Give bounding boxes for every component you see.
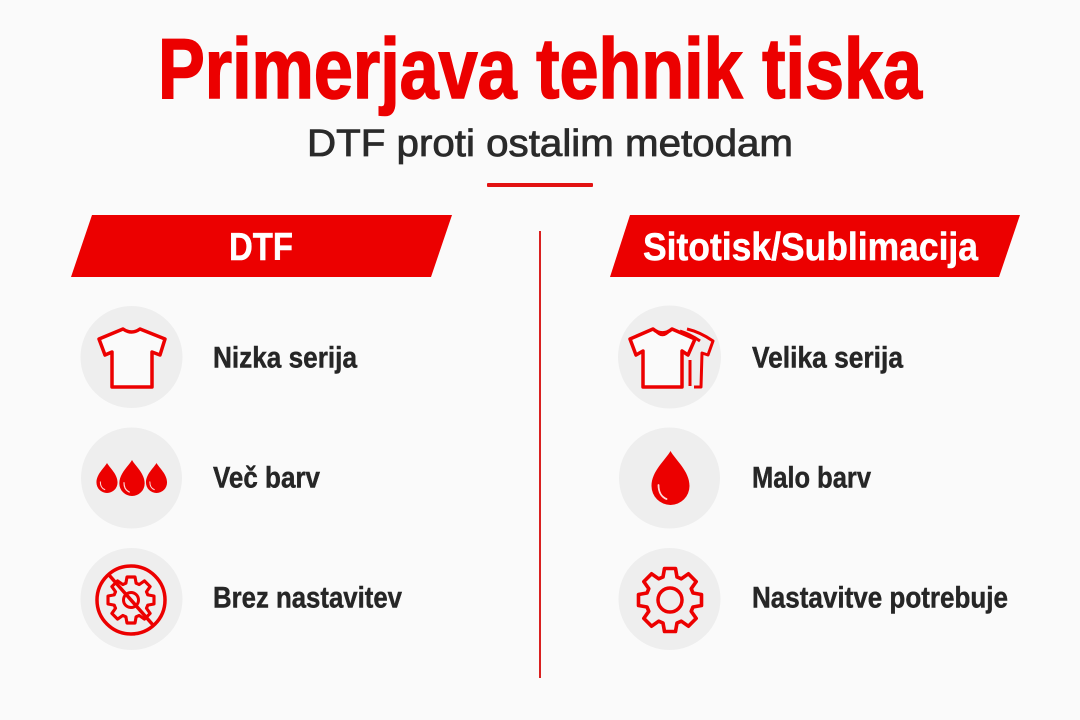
row: Malo barv bbox=[619, 428, 871, 528]
row: Velika serija bbox=[618, 306, 903, 408]
panel: Sitotisk/Sublimacija bbox=[610, 215, 1020, 650]
row: Brez nastavitev: Brez nastavitev bbox=[213, 582, 402, 614]
title underline bbox=[487, 183, 593, 187]
DTF header banner bbox=[71, 215, 452, 277]
Sitotisk/Sublimacija header banner: Sitotisk/Sublimacija bbox=[643, 226, 978, 269]
row: Brez nastavitev bbox=[80, 548, 402, 650]
center divider bbox=[539, 231, 541, 678]
row: Nastavitve potrebuje: Nastavitve potrebuje bbox=[752, 582, 1008, 614]
title: Primerjava tehnik tiska bbox=[158, 22, 923, 117]
row: Več barv bbox=[81, 428, 320, 528]
panel: DTF bbox=[71, 215, 452, 650]
row: Velika serija: Velika serija bbox=[752, 342, 903, 374]
Sitotisk/Sublimacija header banner bbox=[610, 215, 1020, 277]
row: Nizka serija bbox=[80, 306, 357, 408]
row: Nastavitve potrebuje bbox=[618, 548, 1008, 650]
row: Več barv: Več barv bbox=[213, 462, 320, 494]
DTF header banner: DTF bbox=[229, 226, 293, 269]
subtitle: DTF proti ostalim metodam bbox=[307, 123, 793, 165]
row: Nizka serija: Nizka serija bbox=[213, 342, 357, 374]
row: Malo barv: Malo barv bbox=[752, 462, 871, 494]
